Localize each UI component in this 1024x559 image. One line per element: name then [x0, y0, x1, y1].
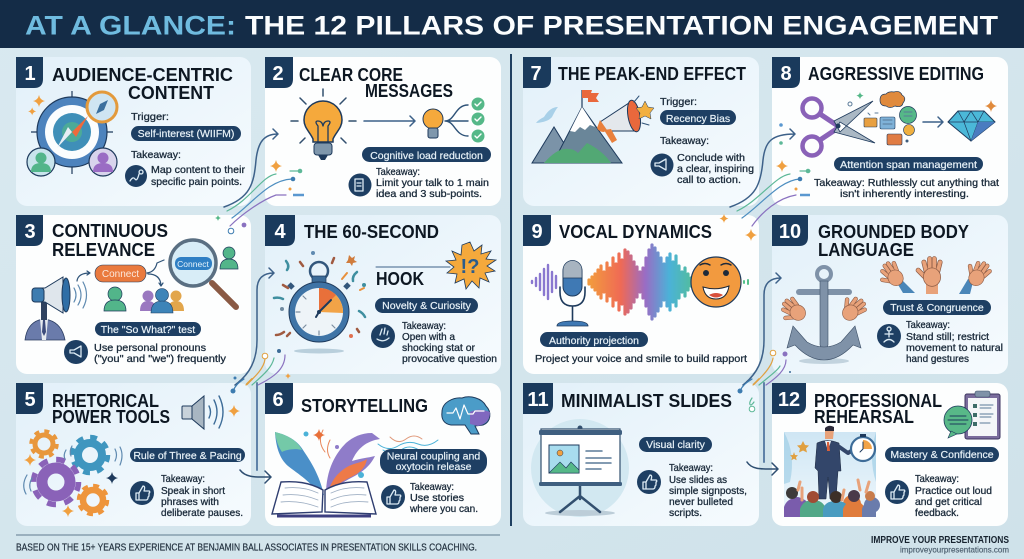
pill: mastery: Mastery & Confidence [890, 449, 994, 461]
takeaway: movement to natural [906, 342, 1003, 354]
panel: 2 clear core messages: 2 [272, 63, 284, 85]
footer: brand [871, 534, 1009, 554]
icon: microphone [557, 260, 588, 326]
pill: trigger: Self-interest (WIIFM) [138, 128, 234, 140]
footer: brand: improveyourpresentations.com [900, 544, 1009, 554]
heading: PROFESSIONAL [814, 391, 942, 411]
panel: 2 clear core messages [265, 57, 501, 206]
takeaway: Takeaway: [669, 462, 713, 474]
heading: STORYTELLING [301, 396, 428, 416]
pill: visual clarity: Visual clarity [646, 439, 706, 451]
heading [299, 65, 453, 101]
arrow: 3 to 4 with streams [234, 268, 291, 385]
panel: 9 vocal dynamics [523, 215, 759, 374]
takeaway [371, 320, 497, 365]
panel: 7 the peak-end effect [523, 57, 759, 206]
takeaway [637, 462, 747, 519]
heading: CLEAR CORE [299, 65, 403, 85]
heading [52, 221, 168, 260]
icon: anchor with open hands [778, 267, 867, 364]
panel: 12 professional rehearsal: 12 [778, 389, 800, 411]
heading: CONTINUOUS [52, 221, 168, 241]
takeaway: Map content to their [151, 164, 246, 176]
takeaway: where you can. [409, 503, 478, 515]
panel: 11 minimalist slides: 11 [527, 389, 549, 411]
trigger label: Trigger: [660, 96, 697, 108]
confetti [274, 251, 366, 338]
takeaway: Limit your talk to 1 main [376, 177, 489, 189]
takeaway: Conclude with [677, 152, 745, 164]
heading [818, 222, 969, 260]
icon: mountain with flag [532, 90, 622, 163]
takeaway: feedback. [915, 507, 959, 519]
panel: 1 audience-centric content: 1 [24, 63, 36, 85]
panel: 4 the 60-second hook [265, 215, 501, 374]
icon: connect pill and arrows [77, 260, 164, 286]
heading: THE PEAK-END EFFECT [558, 64, 746, 84]
icon: brain [442, 397, 490, 434]
takeaway: Takeaway: [906, 319, 950, 331]
icon: magnifying glass [170, 240, 236, 307]
icon: surprise burst: !? [461, 256, 479, 278]
takeaway: Stand still; restrict [906, 331, 989, 343]
takeaway: scripts. [669, 507, 702, 519]
panel: 10 grounded body language [772, 215, 1008, 374]
panel: 10 grounded body language: 10 [779, 221, 801, 243]
takeaway: deliberate pauses. [161, 507, 243, 519]
pill: authority projection: Authority projection [549, 335, 639, 347]
pill: neural coupling: Neural coupling and [387, 450, 480, 462]
header banner [0, 0, 1024, 48]
takeaway [348, 166, 489, 200]
icon: content fragments [848, 91, 916, 145]
arrow: 1 to 2 with streams [215, 129, 304, 234]
panel: 11 minimalist slides [523, 383, 759, 526]
heading: RELEVANCE [52, 240, 155, 260]
takeaway: provocative question [402, 353, 497, 365]
heading: MESSAGES [365, 81, 453, 101]
icon: open book with ribbons [272, 429, 438, 516]
arrow: idea to sub-points [364, 116, 415, 126]
takeaway: Takeaway: [410, 481, 454, 493]
takeaway: Use personal pronouns [94, 342, 206, 354]
arrow: 5 to 6 [230, 379, 271, 483]
takeaway: specific pain points. [151, 176, 242, 188]
icon: speaker with megaphone [25, 277, 86, 340]
panel: 6 storytelling: 6 [272, 389, 284, 411]
icon: megaphone and star [597, 96, 654, 143]
heading: LANGUAGE [818, 240, 914, 260]
pill: so what test: The "So What?" test [101, 324, 195, 336]
title: THE 12 PILLARS OF PRESENTATION ENGAGEMENT [245, 10, 999, 40]
takeaway [650, 135, 754, 186]
takeaway: and get critical [915, 496, 982, 508]
arrow: 9 to 10 with streams [743, 273, 791, 385]
heading: GROUNDED BODY [818, 222, 969, 242]
title: AT A GLANCE: [25, 10, 236, 40]
icon: gears [24, 431, 122, 517]
heading: VOCAL DYNAMICS [559, 222, 712, 242]
heading [304, 222, 439, 289]
panel: 1 audience-centric content [16, 57, 251, 206]
takeaway: Open with a [402, 331, 455, 343]
pill: cognitive load [362, 147, 491, 162]
panel: 3 continuous relevance: 3 [24, 221, 36, 243]
takeaway: Takeaway: [376, 166, 420, 178]
takeaway [130, 473, 243, 519]
takeaway [814, 177, 999, 200]
heading: RHETORICAL [52, 391, 159, 411]
panel: 6 storytelling [265, 383, 501, 526]
icon: audience [104, 247, 238, 313]
arrow: 11 to 12 [738, 379, 778, 475]
pill: recency bias: Recency Bias [666, 113, 730, 125]
panel: 5 rhetorical power tools: 5 [24, 389, 36, 411]
icon: stopwatch [289, 262, 349, 354]
heading [52, 65, 233, 103]
takeaway [381, 481, 478, 515]
heading: AGGRESSIVE EDITING [808, 64, 984, 84]
pill: neural coupling [380, 449, 487, 474]
takeaway: a clear, inspiring [677, 163, 754, 175]
panel: 8 aggressive editing: 8 [780, 63, 792, 85]
pill: cognitive load: Cognitive load reduction [370, 150, 483, 162]
icon: magnifying glass: Connect [177, 259, 209, 269]
heading: CONTENT [128, 83, 214, 103]
footer: source line: BASED ON THE 15+ YEARS EXPERIENCE AT BENJAMIN BALL ASSOCIATES IN PRESENTATION SKILLS COACHING. [16, 542, 477, 554]
pill: authority projection [540, 332, 648, 347]
takeaway: shocking stat or [402, 342, 475, 354]
heading: AUDIENCE-CENTRIC [52, 65, 233, 85]
takeaway: phrases with [161, 496, 219, 508]
pill: novelty: Novelty & Curiosity [382, 300, 472, 312]
takeaway: Takeaway: [161, 473, 205, 485]
arrow: to diamond [923, 117, 943, 127]
takeaway: Takeaway: [660, 135, 709, 147]
icon: diamond [948, 100, 997, 141]
arrow: 7 to 8 with streams [720, 123, 810, 241]
panel: 3 continuous relevance [16, 215, 251, 374]
takeaway: Takeaway: [131, 149, 181, 161]
pill: visual clarity [639, 437, 712, 452]
takeaway: never bulleted [669, 496, 733, 508]
chart: sound waveform [532, 245, 748, 319]
heading: THE 60-SECOND [304, 222, 439, 242]
pill: attention span: Attention span management [840, 159, 977, 171]
icon: projector screen [531, 419, 629, 517]
takeaway: Project your voice and smile to build rapport [535, 353, 747, 365]
takeaway [64, 340, 227, 365]
takeaway: call to action. [677, 174, 741, 186]
takeaway: hand gestures [906, 353, 969, 365]
icon: clipboard and speech bubble [944, 391, 1000, 439]
pill: rule of three: Rule of Three & Pacing [133, 450, 242, 462]
takeaway: Use slides as [669, 474, 727, 486]
icon: raised hands [877, 258, 992, 294]
centre divider [510, 54, 512, 526]
takeaway [125, 149, 246, 188]
pill: neural coupling: oxytocin release [396, 461, 472, 473]
takeaway: simple signposts, [669, 485, 747, 497]
panel: 4 the 60-second hook: 4 [274, 221, 286, 243]
panel: 12 professional rehearsal [772, 383, 1008, 526]
takeaway: isn't inherently interesting. [840, 188, 969, 200]
takeaway: Takeaway: Ruthlessly cut anything that [814, 177, 999, 189]
pill: recency bias [660, 110, 736, 125]
trigger label: Trigger: [131, 111, 169, 123]
icon: scissors [802, 98, 875, 156]
icon: compass with audience [27, 91, 117, 176]
takeaway: Practice out loud [915, 485, 992, 497]
takeaway: ("you" and "we") frequently [94, 353, 227, 365]
icon: light bulb [291, 89, 356, 160]
heading [814, 391, 942, 427]
icon: connect pill and arrows: Connect [102, 269, 139, 280]
heading: HOOK [376, 269, 424, 289]
panel: 7 the peak-end effect: 7 [530, 63, 542, 85]
takeaway: Takeaway: [402, 320, 446, 332]
icon: speaker [182, 396, 240, 429]
panel: 9 vocal dynamics: 9 [531, 221, 543, 243]
pill: trust [883, 300, 991, 315]
icon: speaker on stage with audience [784, 426, 880, 517]
takeaway [877, 319, 1003, 365]
pill: trust: Trust & Congruence [890, 302, 984, 314]
takeaway: Takeaway: [915, 473, 959, 485]
icon: small bulb with checks [423, 98, 484, 142]
panel: 5 rhetorical power tools [16, 383, 251, 526]
icon: smiling face [691, 257, 741, 307]
icon: surprise burst [446, 242, 496, 289]
takeaway: Speak in short [161, 485, 225, 497]
pill: novelty [375, 298, 478, 313]
heading: POWER TOOLS [52, 407, 170, 427]
takeaway: idea and 3 sub-points. [376, 188, 482, 200]
heading [52, 391, 170, 427]
heading: MINIMALIST SLIDES [561, 391, 732, 411]
takeaway: Use stories [410, 492, 464, 504]
takeaway [885, 473, 992, 519]
heading: REHEARSAL [814, 407, 914, 427]
panel: 8 aggressive editing [772, 57, 1008, 206]
